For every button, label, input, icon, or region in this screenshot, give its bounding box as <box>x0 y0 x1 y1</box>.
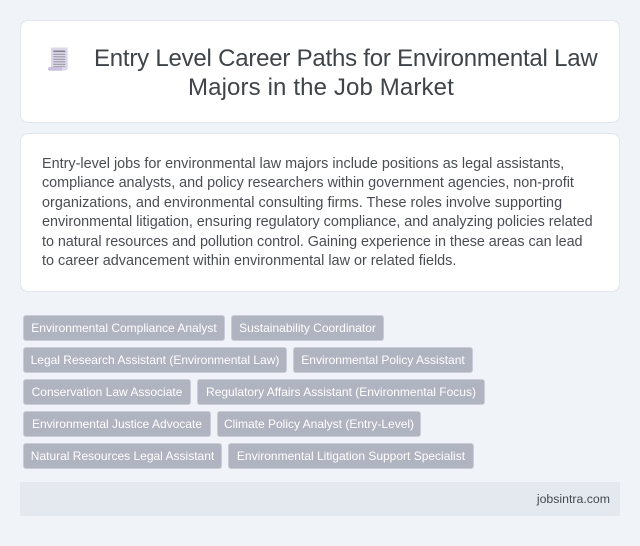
tag list: career paths: Conservation Law Associate <box>32 385 182 399</box>
tag list: career paths <box>23 315 485 469</box>
icon: document scroll <box>48 48 68 71</box>
panel: intro text <box>20 133 620 292</box>
tag list: career paths: Legal Research Assistant (Environmental Law) <box>31 353 279 367</box>
title: Entry Level Career Paths for Environmental Law <box>94 45 597 72</box>
panel: intro text: compliance analysts, and policy researchers within government agencies, non-profit <box>42 175 574 191</box>
footer <box>20 482 620 516</box>
tag list: career paths: Natural Resources Legal Assistant <box>31 449 214 463</box>
panel: intro text: environmental litigation, ensuring regulatory compliance, and analyzing policies related <box>42 214 593 230</box>
tag list: career paths: Environmental Policy Assistant <box>301 353 465 367</box>
footer source: jobsintra.com <box>537 492 610 506</box>
title: Majors in the Job Market <box>188 74 454 101</box>
panel: intro text: to natural resources and pollution control. Gaining experience in these areas can lead <box>42 234 582 250</box>
tag list: career paths: Environmental Compliance Analyst <box>31 321 217 335</box>
tag list: career paths: Sustainability Coordinator <box>239 321 376 335</box>
panel: intro text: to career advancement within environmental law or related fields. <box>42 253 456 269</box>
panel: intro text: Entry-level jobs for environmental law majors include positions as legal assistants, <box>42 156 564 172</box>
tag list: career paths: Environmental Litigation Support Specialist <box>237 449 465 463</box>
title <box>94 45 598 101</box>
panel: intro text: organizations, and environmental consulting firms. These roles involve supporting <box>42 195 562 211</box>
panel: header <box>20 20 620 123</box>
tag list: career paths: Regulatory Affairs Assistant (Environmental Focus) <box>206 385 476 399</box>
tag list: career paths: Environmental Justice Advocate <box>32 417 202 431</box>
tag list: career paths: Climate Policy Analyst (Entry-Level) <box>224 417 414 431</box>
